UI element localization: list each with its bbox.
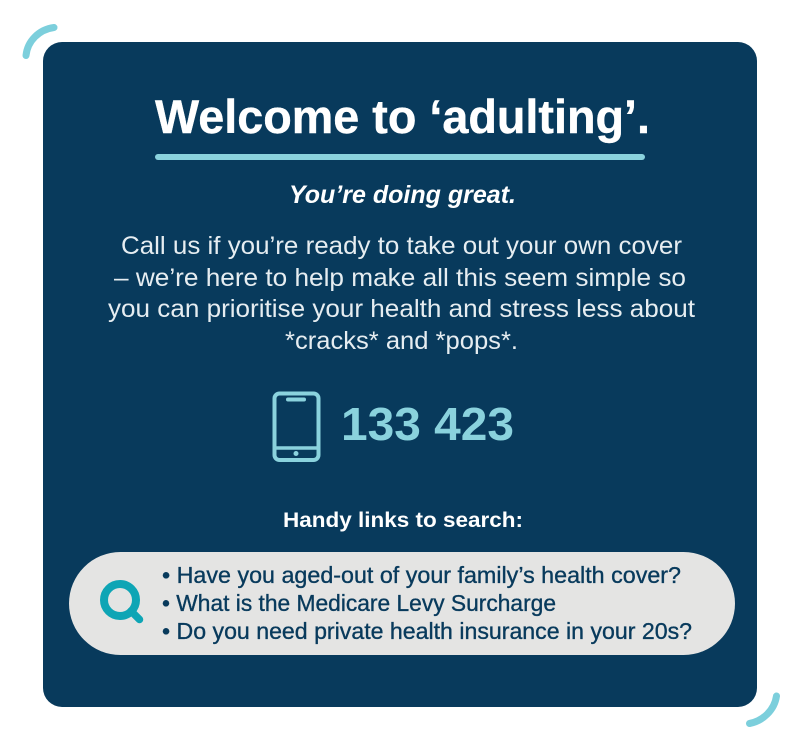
links heading: Handy links to search: bbox=[283, 509, 523, 532]
phone number: 133 423 bbox=[341, 398, 514, 450]
main panel bbox=[43, 42, 757, 707]
body text: you can prioritise your health and stress less about bbox=[108, 295, 695, 323]
icon: smartphone bbox=[274, 394, 318, 460]
link list bbox=[162, 562, 692, 644]
title underline bbox=[155, 154, 645, 160]
subheading: You’re doing great. bbox=[289, 181, 516, 209]
link list: • What is the Medicare Levy Surcharge bbox=[162, 590, 556, 616]
link list: • Have you aged-out of your family’s health cover? bbox=[162, 562, 681, 588]
body text: – we’re here to help make all this seem simple so bbox=[114, 264, 686, 292]
title: Welcome to ‘adulting’. bbox=[155, 90, 650, 143]
link list: • Do you need private health insurance in your 20s? bbox=[162, 618, 692, 644]
search links pill bbox=[69, 552, 735, 655]
body text bbox=[108, 232, 695, 355]
body text: Call us if you’re ready to take out your own cover bbox=[121, 232, 682, 260]
corner accent: top left bbox=[26, 28, 54, 56]
icon: magnifying glass bbox=[104, 584, 140, 620]
corner accent: bottom right bbox=[750, 696, 776, 724]
body text: *cracks* and *pops*. bbox=[285, 327, 518, 355]
